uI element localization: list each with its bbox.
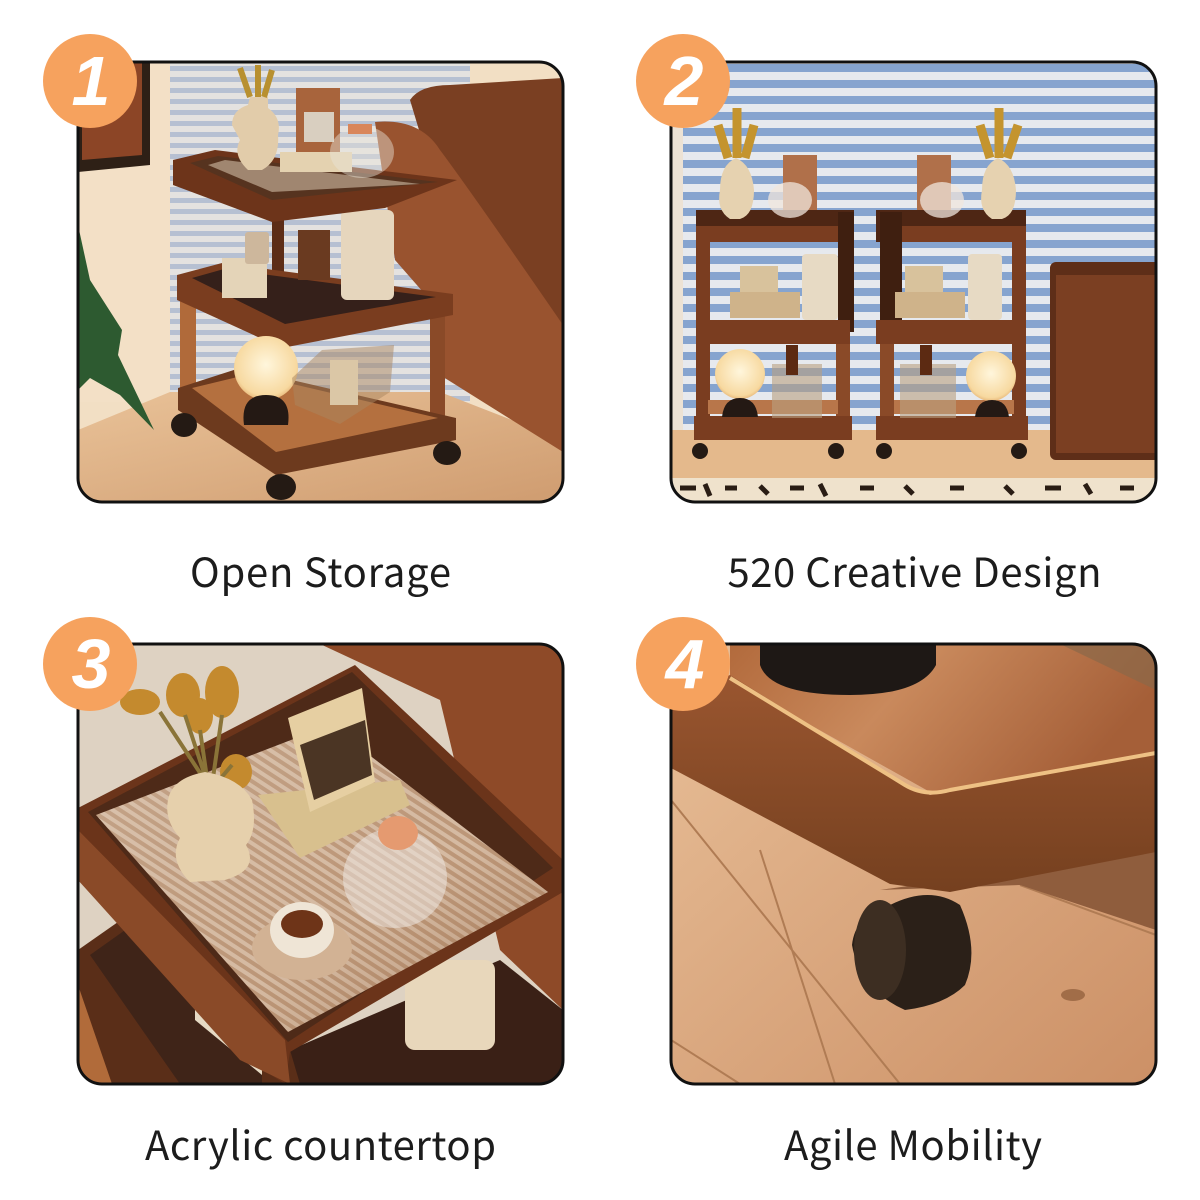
table legs [272, 220, 284, 272]
teapot [343, 828, 447, 928]
panel: agile mobility [671, 644, 1156, 1084]
badge 4 [636, 617, 730, 711]
badge 1 [43, 34, 137, 128]
badge 1: 1 [72, 42, 110, 120]
lower shelf [78, 915, 300, 1084]
badge 2: 2 [663, 42, 704, 120]
caption: open storage: Open Storage [190, 541, 451, 599]
badge 3: 3 [72, 625, 111, 703]
bottom shelf [178, 368, 456, 475]
coffee cup [252, 923, 352, 980]
tray [78, 665, 563, 1084]
badge 2 [636, 34, 730, 128]
badge 3 [43, 617, 137, 711]
caption: agile mobility: Agile Mobility [784, 1114, 1042, 1172]
panel: acrylic countertop [78, 644, 563, 1084]
table left [692, 108, 854, 459]
side panel [1050, 262, 1160, 460]
vase and flowers [120, 666, 252, 790]
badge 4: 4 [664, 625, 704, 703]
lamp and basket [234, 336, 298, 400]
panel: 520 creative design [671, 62, 1160, 502]
top shelf [173, 150, 457, 222]
book and calendar [258, 780, 410, 858]
table right [876, 108, 1028, 459]
panel: open storage [78, 62, 563, 502]
caption: acrylic countertop: Acrylic countertop [145, 1114, 496, 1172]
middle shelf [177, 263, 453, 348]
caption: 520 creative design: 520 Creative Design [728, 541, 1102, 599]
caster wheel [852, 895, 971, 1010]
humidifier and objects [341, 210, 394, 300]
wheels [171, 413, 197, 437]
